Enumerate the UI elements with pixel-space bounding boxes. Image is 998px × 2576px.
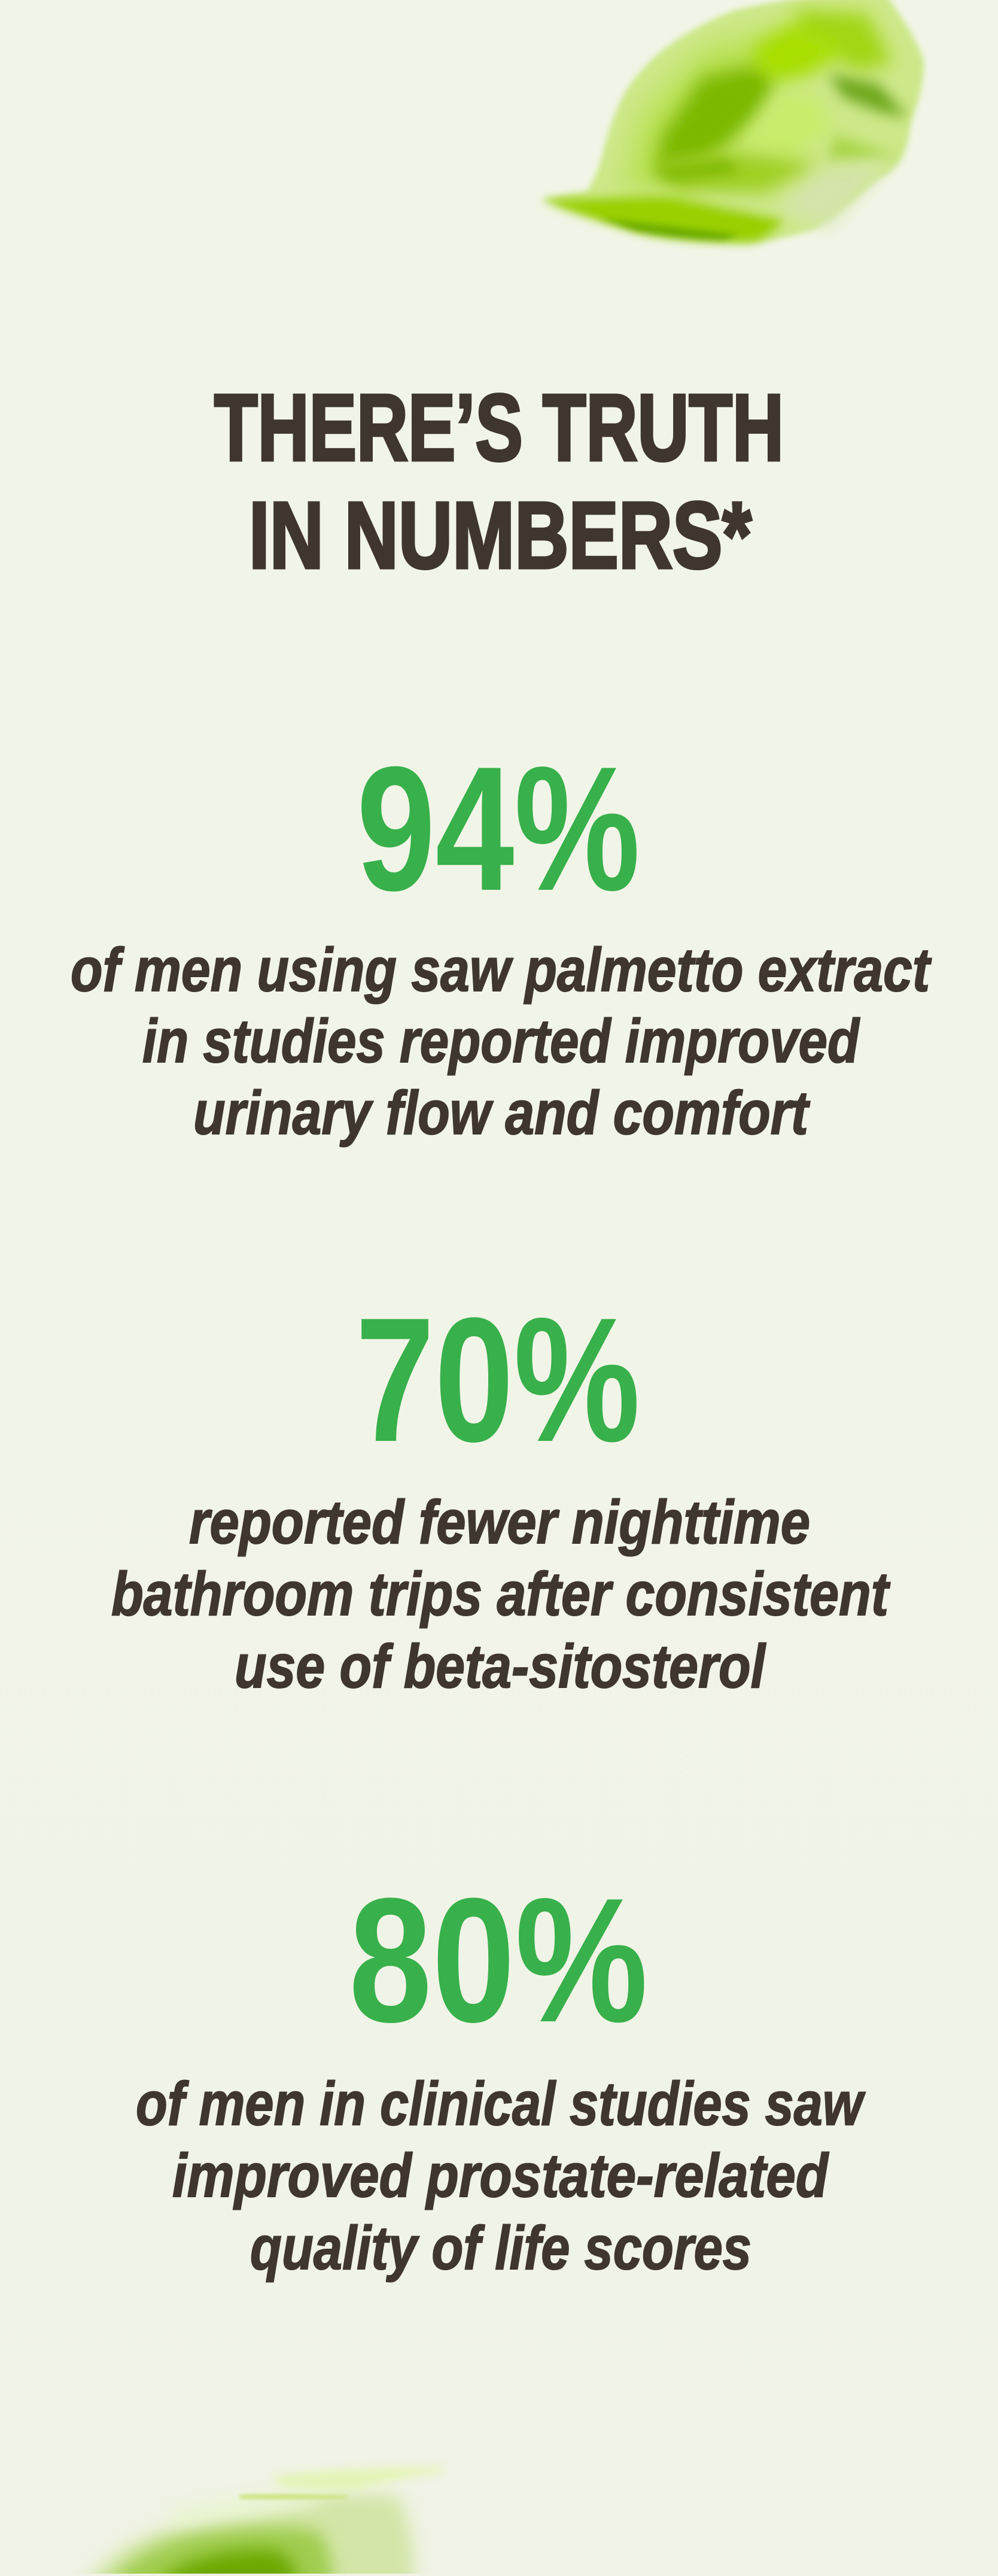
stat: 70%: [111, 1281, 890, 1701]
number: 80%: [349, 1861, 648, 2059]
heading: [214, 375, 784, 588]
description: urinary flow and comfort: [193, 1078, 810, 1147]
description: use of beta-sitosterol: [235, 1632, 766, 1701]
stat: 94%: [71, 729, 932, 1147]
icon: blurred leaf bottom left: [78, 2468, 446, 2576]
description: [136, 2069, 866, 2282]
icon: blurred leaf top right: [541, 0, 924, 244]
number: 70%: [355, 1281, 640, 1479]
heading line 1: THERE’S TRUTH: [214, 375, 784, 480]
description: improved prostate-related: [172, 2141, 829, 2210]
number: 94%: [357, 729, 640, 927]
description: of men in clinical studies saw: [136, 2069, 866, 2138]
description: [111, 1488, 890, 1701]
stat: 80%: [136, 1861, 866, 2282]
description: [71, 935, 932, 1147]
heading line 2: IN NUMBERS*: [249, 483, 751, 588]
description: quality of life scores: [250, 2213, 751, 2282]
description: in studies reported improved: [142, 1006, 860, 1075]
description: bathroom trips after consistent: [111, 1559, 890, 1628]
description: reported fewer nighttime: [189, 1488, 810, 1556]
